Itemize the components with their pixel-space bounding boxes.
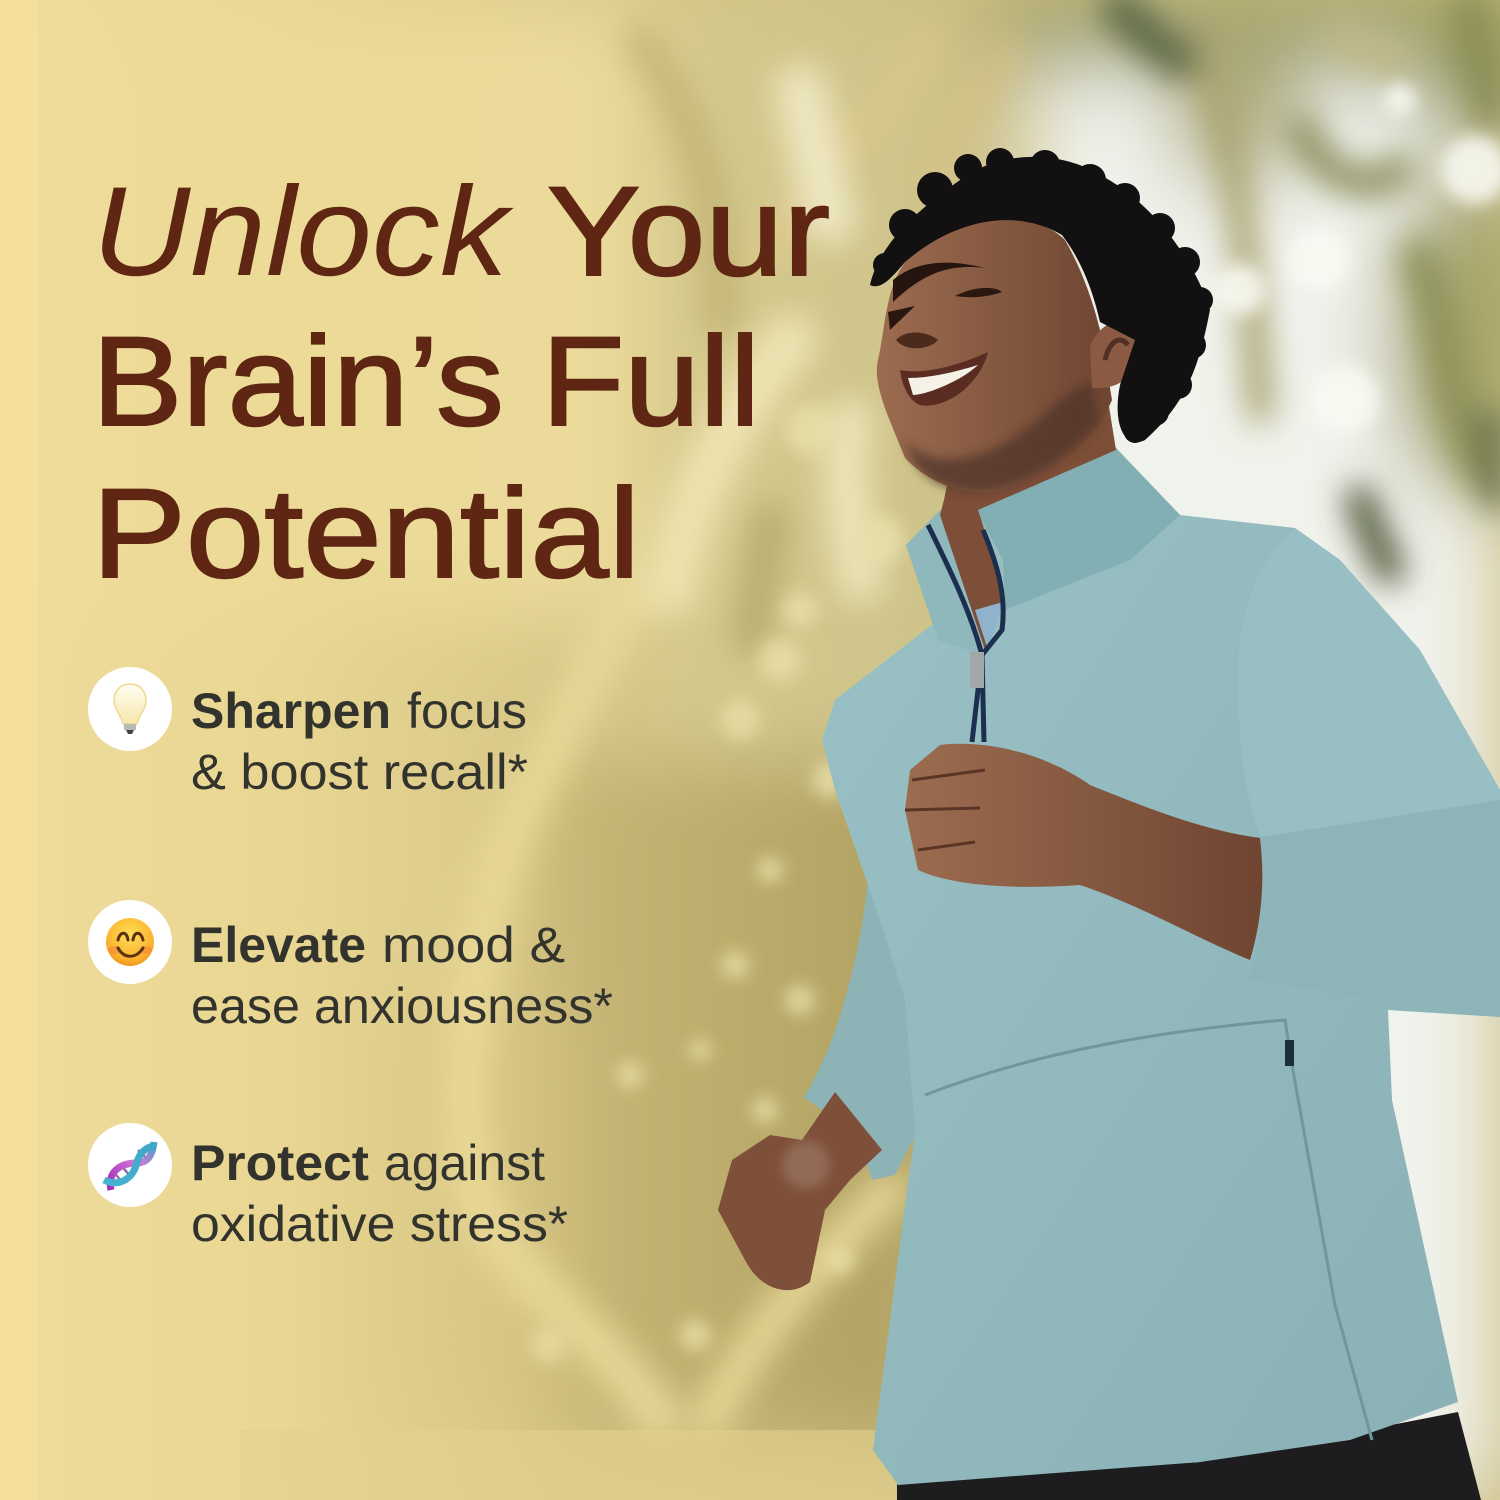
icon: DNA helix [88, 1123, 172, 1207]
pants [897, 1412, 1481, 1500]
benefit: elevate mood: ease anxiousness* [191, 978, 613, 1034]
inner shirt and zipper [975, 602, 1003, 650]
forearm and fist [905, 744, 1262, 960]
smile [900, 352, 988, 406]
icon: light bulb [88, 667, 172, 751]
title: Your [547, 160, 830, 302]
benefit: elevate mood: Elevate [191, 917, 366, 973]
cuff [1250, 800, 1500, 1017]
benefit: elevate mood [88, 900, 613, 1034]
floor ledge [240, 1430, 900, 1500]
person: running man [718, 148, 1500, 1500]
benefit: elevate mood: mood & [382, 917, 565, 973]
title [92, 160, 830, 604]
title: Unlock [92, 160, 514, 302]
neck [940, 400, 1116, 650]
ear [1090, 322, 1137, 388]
lower hand [718, 1092, 882, 1290]
benefit: sharpen focus [88, 667, 528, 800]
title: Potential [92, 462, 640, 604]
title: Brain’s Full [92, 310, 760, 452]
far arm sleeve [803, 880, 918, 1180]
benefit: protect against oxidative stress [88, 1123, 568, 1252]
head [877, 219, 1112, 493]
benefit: sharpen focus: Sharpen [191, 683, 391, 739]
hair [870, 148, 1213, 443]
sleeve [1238, 528, 1500, 840]
jaw shadow [905, 380, 1100, 492]
pocket seams [925, 1020, 1372, 1440]
torso [822, 447, 1500, 1485]
yellow gradient wash over left [0, 0, 1000, 1500]
collar [976, 447, 1180, 610]
benefit: protect against oxidative stress: oxidative stress* [191, 1196, 568, 1252]
benefit: protect against oxidative stress: against [384, 1135, 545, 1191]
benefit: sharpen focus: focus [407, 683, 527, 739]
benefit: protect against oxidative stress: Protect [191, 1135, 369, 1191]
benefit: sharpen focus: & boost recall* [191, 744, 528, 800]
icon: smiling face [88, 900, 172, 984]
